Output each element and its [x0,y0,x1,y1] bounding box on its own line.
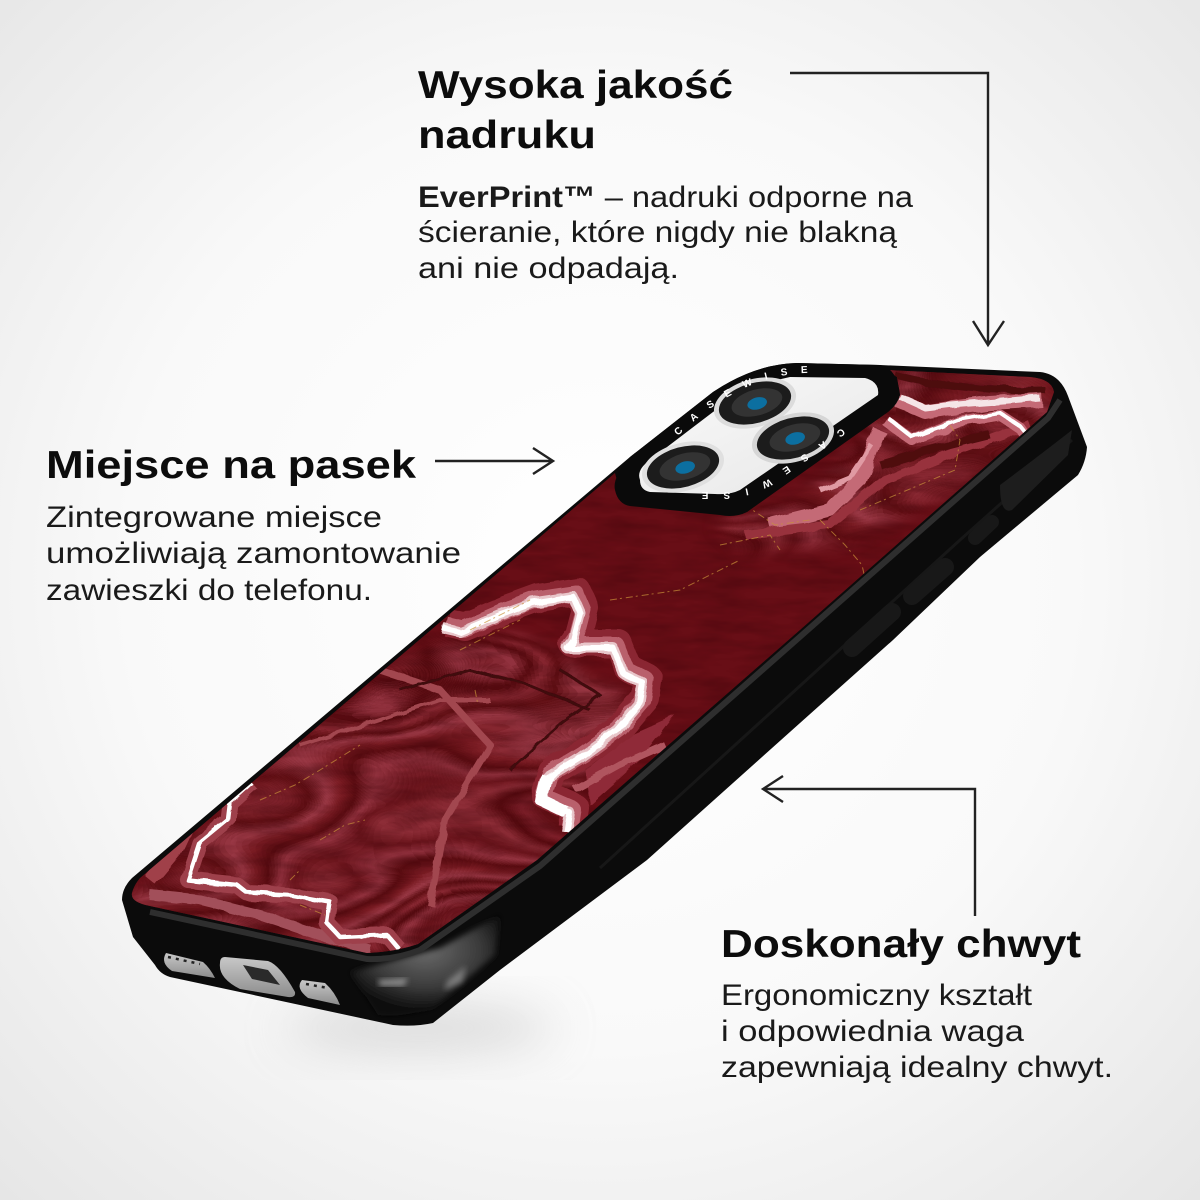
camera bump [614,363,900,516]
arrow [790,73,1004,345]
lens 2 [746,404,840,472]
phone shadow [285,1008,555,1048]
charging port [220,957,295,997]
ring lettering bottom: CASEWISE [702,429,844,499]
side buttons [852,522,992,648]
side switch [1000,430,1072,511]
body text: Ergonomiczny kształt [721,979,1033,1012]
gold veins [260,425,960,915]
lens 1 [708,369,802,437]
case body [122,363,1087,1026]
body text: zapewniają idealny chwyt. [721,1051,1113,1084]
bottom vein [188,783,398,948]
arrow [435,448,553,474]
callout: grip [721,776,1113,1084]
case corner highlight [350,915,500,1016]
body text: i odpowiednia waga [721,1015,1024,1048]
heading: nadruku [418,114,596,157]
body text [46,501,461,607]
lighter wedge by edge [585,715,675,805]
heading: Miejsce na pasek [46,444,416,487]
top-right marble veins [895,375,1045,390]
body text [721,979,1113,1084]
marble back [132,370,1054,953]
body text: zawieszki do telefonu. [46,574,372,607]
speaker grille right [300,980,340,1005]
phone case illustration [122,363,1087,1026]
camera ring [615,363,900,516]
body text: EverPrint™ – nadruki odporne na [418,181,913,214]
callout: print quality [418,64,1004,345]
camera plate [639,377,878,494]
centre vein [443,592,648,832]
body text [418,181,913,285]
marble bands [380,670,490,905]
body text: ani nie odpadają. [418,252,679,285]
body text: Zintegrowane miejsce [46,501,382,534]
ring lettering top: CASEWISE [674,366,808,434]
case inner rim [150,400,1060,959]
arrow [763,776,975,916]
heading: Wysoka jakość [418,64,733,107]
lens 3 [636,433,730,501]
speaker grille left [164,953,215,978]
body text: ścieranie, które nigdy nie blakną [418,216,897,249]
heading: Doskonały chwyt [721,923,1081,966]
heading [418,64,733,157]
body text: umożliwiają zamontowanie [46,537,461,570]
callout: strap mount [46,444,553,607]
